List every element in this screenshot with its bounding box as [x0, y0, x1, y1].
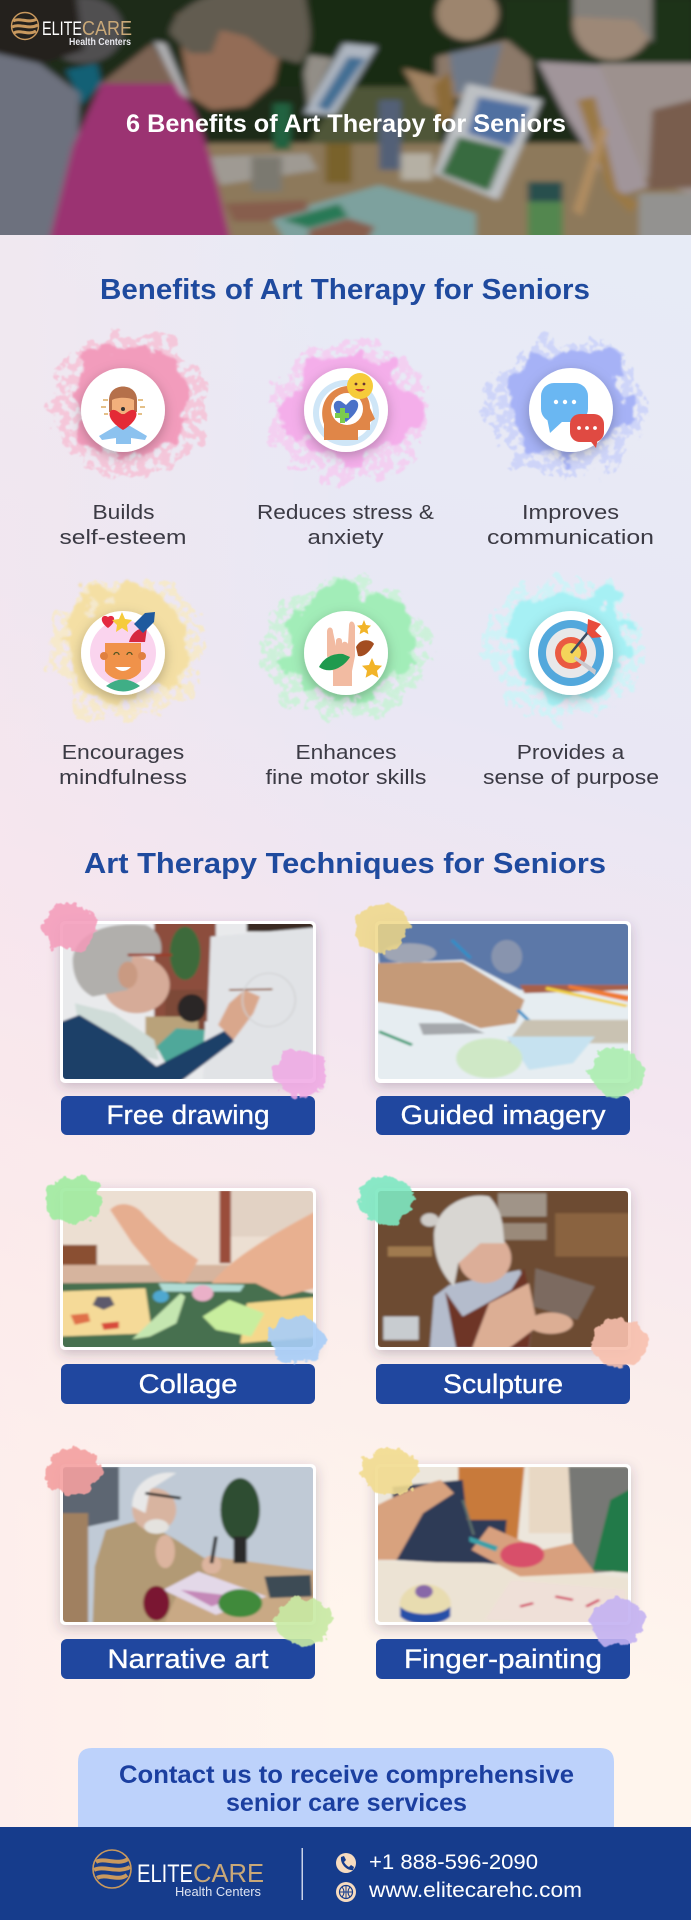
card frame — [375, 1188, 631, 1350]
watercolor blob cyan outer — [484, 578, 644, 718]
card frame — [375, 921, 631, 1083]
caption: narrative art — [61, 1639, 315, 1679]
logo: Elite Care top: CARE — [82, 18, 132, 40]
watercolor blob green outer — [260, 578, 428, 718]
phone contact: +1 888-596-2090 — [369, 1851, 538, 1874]
photo: man painting at table — [63, 1467, 313, 1622]
card frame — [60, 1464, 316, 1625]
caption: collage — [61, 1364, 315, 1404]
label: Reduces stress & — [257, 501, 434, 524]
label: Provides a — [517, 741, 625, 764]
logo: Elite Care top: ELITE — [42, 19, 82, 40]
caption: guided imagery — [376, 1096, 630, 1135]
icon: hand with paint — [304, 611, 388, 695]
call to action panel: senior care services — [226, 1789, 467, 1817]
label: sense of purpose — [483, 766, 659, 789]
caption: guided imagery: Guided imagery — [400, 1100, 606, 1130]
technique card: guided imagery — [355, 904, 644, 1135]
label — [487, 501, 654, 549]
call to action panel: Contact us to receive comprehensive — [119, 1761, 574, 1789]
watercolor blob yellow outer — [48, 581, 204, 721]
label — [266, 741, 426, 789]
hero photo: seniors painting outdoors — [0, 0, 691, 253]
label — [60, 501, 186, 549]
benefit: builds self-esteem — [50, 333, 210, 549]
label — [257, 501, 434, 549]
label: Improves — [522, 501, 619, 524]
label: mindfulness — [59, 766, 187, 789]
splat yellow — [355, 904, 409, 952]
heading: techniques: Art Therapy Techniques for Seniors — [84, 848, 606, 880]
benefit: improves communication — [487, 338, 654, 549]
caption: finger-painting — [376, 1639, 630, 1679]
label: Encourages — [62, 741, 184, 764]
footer logo: CARE — [193, 1858, 264, 1888]
caption: free drawing — [61, 1096, 315, 1135]
watercolor blob orchid outer — [268, 340, 432, 484]
logo: Elite Care top: Health Centers — [69, 37, 131, 48]
heading: benefits: Benefits of Art Therapy for Seniors — [100, 274, 590, 306]
photo: origami hands — [63, 1191, 313, 1347]
label: anxiety — [308, 526, 384, 549]
photo: man drawing — [63, 924, 313, 1079]
label: Builds — [92, 501, 154, 524]
watercolor blob periwinkle — [510, 348, 630, 456]
label: fine motor skills — [266, 766, 426, 789]
footer — [0, 1827, 691, 1920]
icon: head with heart — [304, 368, 388, 452]
icon: target — [529, 611, 613, 695]
card frame — [60, 921, 316, 1083]
watercolor blob green — [284, 590, 412, 698]
splat teal — [358, 1176, 414, 1224]
watercolor blob yellow — [66, 591, 186, 699]
caption: sculpture: Sculpture — [443, 1369, 563, 1399]
splat yellow — [362, 1448, 418, 1496]
watercolor blob orchid — [286, 354, 414, 462]
watercolor blob pink outer — [50, 333, 210, 477]
benefit: fine motor skills — [260, 578, 428, 789]
benefit: sense of purpose — [483, 578, 659, 789]
technique card: collage — [46, 1176, 325, 1404]
footer logo — [93, 1850, 264, 1899]
watercolor blob cyan — [508, 590, 632, 698]
technique card: sculpture — [358, 1176, 647, 1404]
splat green — [46, 1176, 102, 1224]
website contact: www.elitecarehc.com — [368, 1879, 582, 1902]
technique card: free drawing — [43, 904, 328, 1135]
splat lavender — [589, 1598, 645, 1646]
splat orchid — [274, 1049, 328, 1097]
hero title: 6 Benefits of Art Therapy for Seniors — [126, 110, 566, 138]
benefit: reduces stress — [257, 340, 434, 549]
technique card: finger-painting — [362, 1448, 645, 1679]
splat blue — [269, 1316, 325, 1364]
icon: girl with heart — [81, 368, 165, 452]
benefit: encourages mindfulness — [48, 581, 204, 789]
photo: woman with clay pot — [375, 1188, 635, 1352]
footer logo: Health Centers — [175, 1884, 261, 1899]
label: Enhances — [296, 741, 396, 764]
watercolor blob periwinkle outer — [488, 338, 644, 478]
technique card: narrative art — [45, 1448, 332, 1679]
icon: happy mind — [81, 611, 165, 695]
splat pink — [43, 904, 97, 952]
splat red — [45, 1448, 101, 1496]
label — [59, 741, 187, 789]
caption: collage: Collage — [138, 1369, 238, 1399]
card frame — [375, 1464, 631, 1625]
label: communication — [487, 526, 654, 549]
watercolor blob pink — [70, 348, 194, 456]
caption: finger-painting: Finger-painting — [404, 1644, 602, 1674]
card frame — [60, 1188, 316, 1350]
photo: painted hand — [375, 1463, 635, 1627]
caption: free drawing: Free drawing — [106, 1100, 270, 1130]
label — [483, 741, 659, 789]
caption: narrative art: Narrative art — [108, 1644, 269, 1674]
call to action panel — [78, 1748, 614, 1827]
photo: hand sketching with pencil — [375, 920, 635, 1083]
logo: Elite Care top — [12, 12, 132, 48]
splat lime — [276, 1598, 332, 1646]
icon: speech bubbles — [529, 368, 613, 452]
hero banner — [0, 0, 691, 253]
label: self-esteem — [60, 526, 186, 549]
splat green — [590, 1048, 644, 1096]
splat salmon — [591, 1319, 647, 1367]
caption: sculpture — [376, 1364, 630, 1404]
footer logo: ELITE — [137, 1860, 193, 1888]
